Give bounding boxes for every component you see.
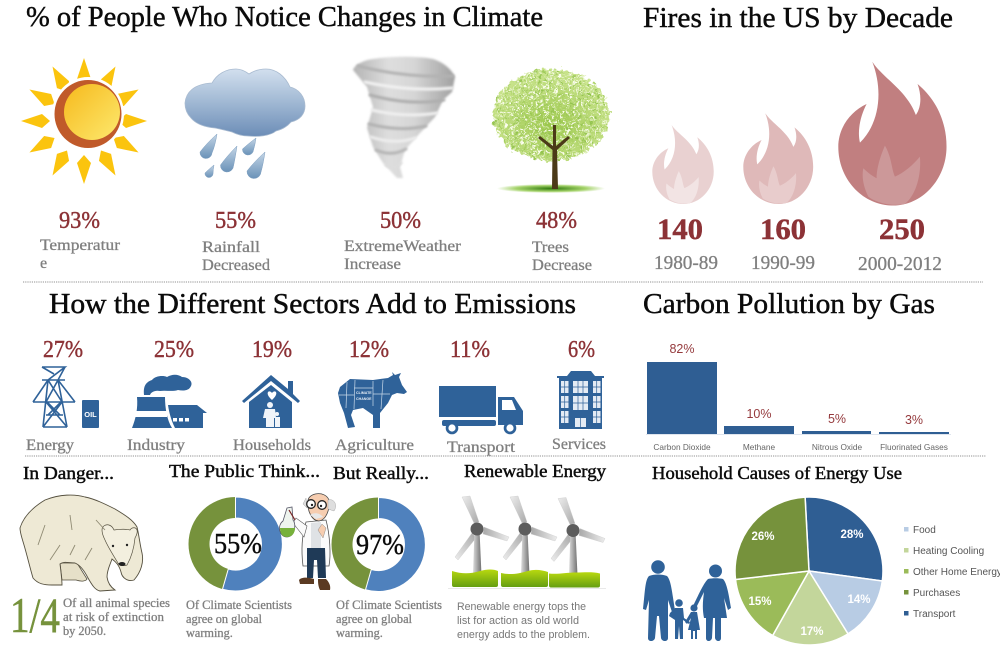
sector: industry [127, 337, 207, 454]
stat: extreme weather: Increase [344, 256, 401, 273]
stat: 1990-99: 160 [760, 213, 806, 246]
donut chart: 55%: 55% [214, 528, 262, 560]
stat: 2000-2012 [858, 213, 942, 275]
sector: industry: Industry [127, 437, 185, 454]
panel: the public think [169, 461, 320, 640]
sector: services: Services [552, 436, 606, 453]
text: animal species: at risk of extinction [63, 610, 164, 624]
bar chart: Nitrous Oxide [812, 442, 863, 452]
sector: agriculture: Agriculture [335, 437, 414, 454]
stat: temperature [40, 208, 121, 272]
stat: 1990-99: 1990-99 [751, 252, 815, 274]
heading: fires: Fires in the US by Decade [643, 2, 953, 34]
stat: trees: Decrease [532, 257, 592, 274]
text: renewable caption: list for action as old world [457, 615, 579, 627]
sector: households [233, 337, 311, 454]
legend [904, 525, 1000, 620]
stat: 1980-89: 140 [657, 213, 703, 246]
sector: agriculture [335, 337, 414, 454]
panel: but really [332, 463, 442, 640]
text: animal species: Of all animal species [63, 596, 170, 610]
text: animal species [63, 596, 170, 638]
heading: renewable energy: Renewable Energy [464, 461, 606, 481]
stat: 1980-89: 1980-89 [654, 252, 718, 274]
text: animal species: by 2050. [63, 624, 106, 638]
bar chart: 82% [669, 342, 695, 356]
stat: extreme weather: 50% [380, 208, 421, 234]
sector: energy [26, 337, 99, 454]
text: renewable caption: energy adds to the problem. [457, 629, 590, 641]
text: but really caption: warming. [336, 626, 383, 640]
stat: one in four: 1/4 [10, 587, 60, 643]
heading: people who notice changes: % of People Who Notice Changes in Climate [26, 1, 543, 33]
heading: but really: But Really... [333, 463, 429, 483]
donut chart: 97% [332, 498, 426, 592]
bar chart: Methane [743, 442, 776, 452]
stat: extreme weather: ExtremeWeather [344, 238, 462, 255]
sector: transport [439, 337, 523, 456]
icon: scientist with flask [280, 494, 336, 590]
stat: rainfall: Decreased [202, 257, 270, 274]
sector: industry: 25% [154, 337, 194, 363]
text: public think caption: agree on global [186, 612, 263, 626]
stat: 1980-89 [654, 213, 718, 274]
divider lines [23, 281, 983, 283]
legend: Purchases [913, 588, 960, 599]
pie labels: 14% [847, 594, 871, 606]
panel: people who notice changes in climate [21, 1, 609, 274]
bar chart [646, 342, 951, 452]
legend: Transport [913, 609, 956, 620]
stat: trees: 48% [536, 208, 577, 234]
text: renewable caption: Renewable energy tops the [457, 601, 586, 613]
sector: transport: 11% [450, 337, 490, 363]
icon: rain cloud [185, 69, 305, 179]
bar chart: 10% [746, 407, 772, 421]
sector: energy: Energy [26, 437, 74, 454]
stat: rainfall: Rainfall [202, 239, 261, 256]
stat: rainfall: 55% [215, 208, 256, 234]
sector: agriculture: 12% [349, 337, 389, 363]
bar chart: 5% [828, 412, 846, 426]
sector: services: 6% [568, 337, 595, 363]
sector: transport: Transport [447, 439, 516, 456]
stat: 2000-2012: 250 [879, 213, 925, 246]
text: renewable caption [457, 601, 590, 641]
bar chart: 3% [905, 413, 923, 427]
text: but really caption [336, 598, 442, 640]
panel: household energy use [643, 463, 1000, 645]
stat: 2000-2012: 2000-2012 [858, 253, 942, 275]
sector: agriculture: CLIMATE [356, 391, 372, 395]
sector: energy: OIL [84, 410, 97, 419]
pie labels [748, 529, 871, 638]
heading: in danger: In Danger... [23, 463, 114, 483]
stat: rainfall [202, 208, 270, 274]
legend: Heating Cooling [913, 546, 984, 557]
sector: services [552, 337, 606, 453]
panel: carbon pollution by gas [643, 289, 951, 452]
text: public think caption: warming. [186, 626, 233, 640]
stat: temperature: Temperatur [40, 237, 121, 254]
text: public think caption [186, 598, 292, 640]
heading: sectors: How the Different Sectors Add to Emissions [49, 289, 576, 320]
stat: temperature: e [40, 255, 47, 272]
icon: flame 1980-89 [652, 125, 714, 204]
sector: agriculture: CHANGE [356, 397, 372, 401]
legend: Food [913, 525, 936, 536]
pie labels: 17% [800, 626, 824, 638]
icon: tree [493, 69, 609, 193]
pie labels: 28% [840, 529, 864, 541]
icon: tornado [353, 57, 455, 178]
sector: households: Households [233, 437, 311, 454]
heading: carbon pollution: Carbon Pollution by Gas [643, 289, 935, 320]
heading: household causes: Household Causes of Energy Use [652, 463, 902, 483]
bar chart: Carbon Dioxide [653, 442, 711, 452]
stat: temperature: 93% [59, 208, 100, 234]
sector: energy: 27% [43, 337, 83, 363]
icon: flame 1990-99 [743, 113, 813, 204]
bar chart: Fluorinated Gases [880, 442, 948, 452]
panel: in danger [10, 463, 170, 643]
text: but really caption: agree on global [336, 612, 413, 626]
text: public think caption: Of Climate Scientists [186, 598, 292, 612]
donut chart: 97%: 97% [356, 529, 404, 561]
panel: sectors and emissions [26, 289, 606, 456]
icon: family [643, 560, 731, 641]
text: but really caption: Of Climate Scientists [336, 598, 442, 612]
heading: public think: The Public Think... [169, 461, 320, 481]
donut chart: 55% [188, 497, 282, 591]
pie labels: 15% [748, 596, 772, 608]
icon: flame 2000-2012 [838, 62, 947, 206]
panel: renewable energy [448, 461, 606, 641]
panel: fires by decade [643, 2, 953, 275]
icon: wind turbines [448, 496, 606, 588]
pie chart [735, 497, 883, 645]
stat: trees [532, 208, 592, 274]
icon: polar bear [20, 495, 143, 591]
stat: trees: Trees [532, 239, 569, 256]
pie labels: 26% [751, 531, 775, 543]
legend: Other Home Energy [913, 567, 1000, 578]
icon: sun [21, 58, 147, 184]
stat: 1990-99 [751, 213, 815, 274]
stat: extreme weather [344, 208, 462, 273]
sector: households: 19% [252, 337, 292, 363]
